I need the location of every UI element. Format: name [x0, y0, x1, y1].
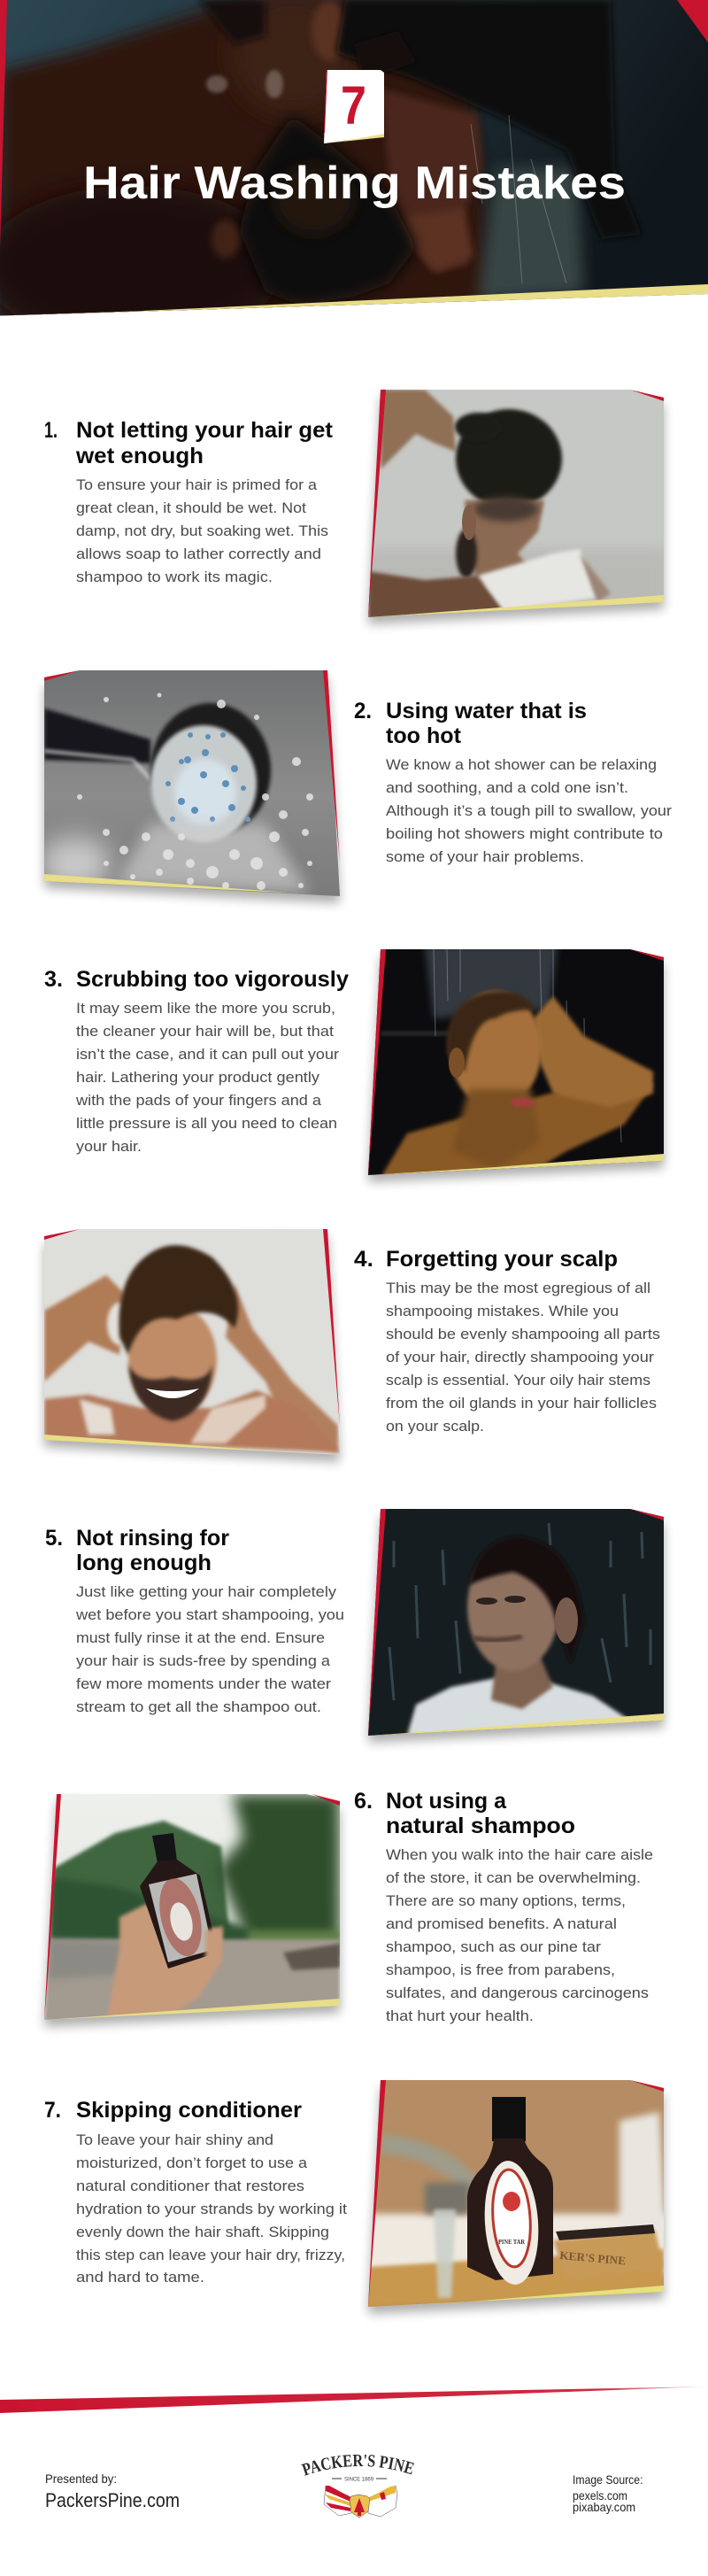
- heading 2: Using water that is: [386, 699, 587, 723]
- heading 1: wet enough: [75, 444, 204, 468]
- red accent: [368, 949, 386, 1175]
- body text 3: isn’t the case, and it can pull out your: [76, 1047, 340, 1063]
- body text 5: [75, 1584, 344, 1715]
- body text 7: moisturized, don’t forget to use a: [76, 2155, 308, 2171]
- heading 1: [44, 418, 334, 468]
- body text 3: [75, 1001, 340, 1155]
- body text 3: your hair.: [76, 1139, 142, 1155]
- body text 4: shampooing mistakes. While you: [386, 1303, 619, 1319]
- body text 4: [386, 1280, 660, 1435]
- body text 6: of the store, it can be overwhelming.: [386, 1870, 641, 1886]
- since line: SINCE 1869: [344, 2478, 374, 2483]
- heading 4: 4.: [354, 1247, 373, 1272]
- heading 7: 7.: [44, 2098, 61, 2123]
- body text 6: There are so many options, terms,: [386, 1893, 626, 1909]
- body text 7: this step can leave your hair dry, frizzy,: [76, 2247, 345, 2263]
- hero photo: man with wet hair: [0, 0, 708, 345]
- body text 6: and promised benefits. A natural: [386, 1916, 617, 1932]
- body text 3: hair. Lathering your product gently: [76, 1070, 320, 1086]
- body text 4: of your hair, directly shampooing your: [386, 1350, 655, 1365]
- red corner: [44, 670, 80, 681]
- body text 5: Just like getting your hair completely: [76, 1584, 337, 1600]
- panel: mistake 4: [40, 1226, 660, 1462]
- hero red accent left: [0, 0, 7, 248]
- footer: image source: pexels.com: [573, 2488, 627, 2503]
- footer: presented by: PackersPine.com: [45, 2489, 180, 2511]
- panel: mistake 5: [45, 1505, 668, 1743]
- body text 2: boiling hot showers might contribute to: [386, 826, 663, 842]
- yellow edge: [368, 2286, 664, 2307]
- photo 2: shower head: [40, 666, 345, 903]
- body text 3: little pressure is all you need to clean: [76, 1116, 337, 1132]
- heading 5: long enough: [76, 1551, 212, 1575]
- body text 1: allows soap to lather correctly and: [76, 546, 321, 562]
- hero banner: [0, 0, 708, 345]
- body text 4: This may be the most egregious of all: [386, 1280, 650, 1296]
- panel: mistake 1: [44, 386, 668, 624]
- photo 3: man under shower: [363, 946, 668, 1182]
- body text 3: the cleaner your hair will be, but that: [76, 1024, 334, 1040]
- body text 7: [76, 2132, 347, 2286]
- red corner: [630, 2080, 664, 2092]
- body text 4: from the oil glands in your hair follicles: [386, 1396, 657, 1412]
- body text 5: wet before you start shampooing, you: [75, 1607, 344, 1623]
- red corner: [630, 949, 664, 961]
- heading 1: Not letting your hair get: [76, 418, 334, 443]
- footer: image source: pixabay.com: [573, 2500, 635, 2514]
- number sheet: [324, 70, 384, 143]
- heading 3: Scrubbing too vigorously: [76, 967, 349, 992]
- body text 7: natural conditioner that restores: [76, 2178, 304, 2194]
- body text 4: scalp is essential. Your oily hair stems: [386, 1373, 650, 1389]
- footer: presented by: [45, 2472, 180, 2511]
- logo wordmark: PACKER'S PINE: [301, 2455, 414, 2476]
- body text 7: evenly down the hair shaft. Skipping: [76, 2224, 329, 2240]
- heading 6: 6.: [354, 1789, 373, 1814]
- heading 6: Not using a: [386, 1789, 507, 1814]
- body text 6: shampoo, such as our pine tar: [386, 1939, 602, 1955]
- soap box text: KER'S PINE: [559, 2248, 627, 2268]
- panel: mistake 6: [40, 1789, 653, 2027]
- photo 7: conditioner bottle by faucet: [363, 2077, 668, 2314]
- heading 1: 1.: [44, 418, 58, 443]
- yellow edge: [368, 595, 664, 617]
- body text 7: hydration to your strands by working it: [76, 2201, 347, 2217]
- red accent: [323, 1229, 340, 1426]
- hero yellow edge: [0, 284, 708, 315]
- yellow edge: [44, 1999, 340, 2020]
- body text 3: with the pads of your fingers and a: [75, 1093, 322, 1109]
- bottle label text: PINE TAR: [498, 2239, 526, 2246]
- body text 2: Although it’s a tough pill to swallow, your: [386, 803, 673, 819]
- heading 2: too hot: [386, 723, 462, 748]
- panel: mistake 2: [40, 666, 673, 903]
- body text 4: should be evenly shampooing all parts: [386, 1327, 660, 1342]
- red corner: [630, 1509, 664, 1520]
- body text 6: that hurt your health.: [386, 2008, 534, 2024]
- yellow edge: [368, 1154, 664, 1175]
- body text 6: When you walk into the hair care aisle: [386, 1847, 653, 1863]
- yellow edge: [368, 1713, 664, 1736]
- heading 4: Forgetting your scalp: [386, 1247, 618, 1272]
- body text 2: and soothing, and a cold one isn’t.: [386, 780, 628, 796]
- yellow edge: [44, 1435, 289, 1452]
- footer divider: [0, 2386, 708, 2413]
- heading 6: natural shampoo: [386, 1814, 575, 1838]
- body text 7: To leave your hair shiny and: [76, 2132, 273, 2148]
- body text 5: few more moments under the water: [76, 1676, 332, 1692]
- photo 4: smiling man lathering hair: [40, 1226, 345, 1462]
- body text 6: shampoo, is free from parabens,: [386, 1962, 615, 1978]
- hero red accent top right: [677, 0, 708, 43]
- heading 7: Skipping conditioner: [76, 2098, 302, 2123]
- footer: image source: [573, 2472, 643, 2514]
- body text 5: must fully rinse it at the end. Ensure: [76, 1630, 325, 1646]
- photo 6: hand holding bottle outdoors: [40, 1791, 345, 2027]
- red corner: [312, 1794, 340, 1806]
- photo 5: man in rain: [363, 1505, 668, 1743]
- body text 1: great clean, it should be wet. Not: [76, 500, 306, 516]
- number sheet: 7: [341, 75, 366, 135]
- body text 5: your hair is suds-free by spending a: [76, 1653, 331, 1669]
- title: Hair Washing Mistakes: [83, 158, 626, 209]
- heading 6: [354, 1789, 575, 1838]
- footer: presented by: Presented by:: [45, 2472, 117, 2486]
- body text 5: stream to get all the shampoo out.: [76, 1699, 321, 1715]
- body text 3: It may seem like the more you scrub,: [76, 1001, 335, 1017]
- yellow edge: [44, 874, 289, 893]
- footer: Packer's Pine logo: [301, 2455, 414, 2518]
- body text 2: We know a hot shower can be relaxing: [386, 757, 657, 773]
- body text 2: [386, 757, 673, 865]
- heading 3: 3.: [44, 967, 63, 992]
- body text 6: sulfates, and dangerous carcinogens: [386, 1985, 649, 2001]
- body text 4: on your scalp.: [386, 1419, 484, 1435]
- red corner: [44, 1229, 80, 1240]
- red accent: [44, 1794, 61, 2020]
- heading 2: [354, 699, 587, 748]
- heading 2: 2.: [354, 699, 372, 723]
- red accent: [323, 670, 340, 863]
- heading 5: Not rinsing for: [76, 1526, 229, 1551]
- body text 1: shampoo to work its magic.: [76, 569, 273, 585]
- red corner: [630, 390, 664, 401]
- body text 2: some of your hair problems.: [386, 849, 584, 865]
- crest: [324, 2486, 397, 2518]
- red accent: [368, 390, 386, 617]
- panel: mistake 3: [44, 946, 668, 1182]
- red accent: [368, 2080, 386, 2307]
- red accent: [368, 1509, 386, 1736]
- body text 6: [386, 1847, 653, 2024]
- photo 1: man rinsing hair: [363, 386, 668, 624]
- panel: mistake 7: [44, 2077, 668, 2314]
- body text 7: and hard to tame.: [76, 2270, 204, 2286]
- heading 5: 5.: [45, 1526, 63, 1551]
- body text 1: [76, 477, 328, 585]
- body text 1: To ensure your hair is primed for a: [76, 477, 318, 493]
- footer: image source: Image Source:: [573, 2472, 643, 2487]
- body text 1: damp, not dry, but soaking wet. This: [76, 523, 328, 539]
- heading 5: [45, 1526, 229, 1575]
